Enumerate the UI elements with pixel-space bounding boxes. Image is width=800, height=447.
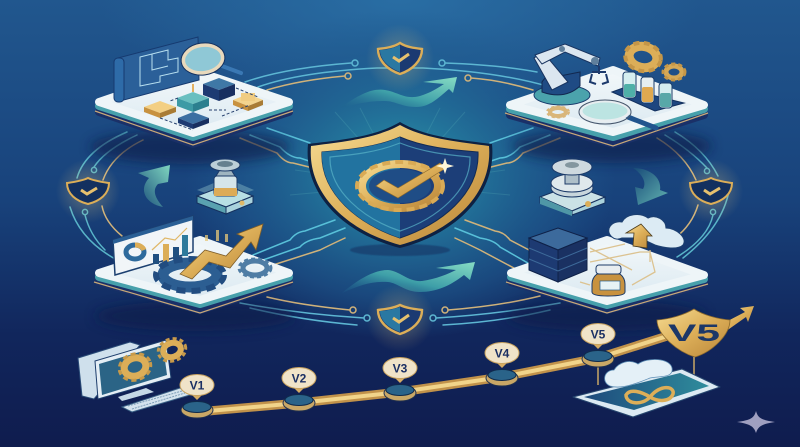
icon: right press	[540, 159, 605, 216]
milestone: V3	[383, 358, 417, 401]
milestone: V2	[282, 368, 316, 411]
small shield: right	[679, 159, 743, 223]
icon: infinity loop	[626, 388, 673, 403]
milestone: V3: V3	[393, 362, 408, 376]
panel: monitoring platform	[94, 216, 295, 331]
icon: blueprint	[114, 37, 199, 102]
main shield	[308, 122, 492, 256]
milestone: V4	[485, 342, 519, 386]
timeline band	[197, 332, 680, 412]
icon: check mark	[376, 163, 446, 198]
arrow: growth	[180, 224, 263, 279]
icon: lens	[579, 100, 656, 128]
arrow: bottom wave	[342, 262, 475, 293]
icon: teal cube	[177, 84, 209, 112]
sparkle	[436, 158, 454, 174]
icon: jar	[592, 265, 625, 296]
icon: gear badge	[357, 162, 443, 210]
icon: test tube rack	[612, 72, 684, 111]
icon: navy cube	[203, 78, 235, 101]
icon: cloud	[609, 215, 684, 248]
milestone: V2: V2	[292, 372, 307, 386]
icon: gold cube right	[233, 93, 263, 111]
arrow: curved right	[633, 168, 668, 205]
icon: gears on screen	[116, 350, 154, 384]
panel: testing platform	[505, 40, 712, 163]
icon: magnifier	[179, 40, 241, 78]
icon: robot arm	[534, 44, 608, 105]
arrow: upload	[626, 224, 652, 248]
V5 gold badge: V5	[668, 320, 720, 347]
right arcs	[657, 132, 730, 258]
icon: tablet with cloud	[573, 357, 720, 417]
icon: navy cube front	[178, 112, 209, 129]
small shield: left	[56, 159, 120, 223]
arrow: top wave	[340, 77, 457, 108]
circuit lines	[70, 60, 730, 325]
V5 gold badge	[657, 306, 754, 357]
icon: left press	[197, 159, 254, 214]
panel: design platform	[90, 37, 293, 164]
icon: small gear	[239, 259, 271, 277]
small shield: bottom	[366, 284, 434, 352]
data traces	[580, 244, 655, 285]
top arcs	[245, 60, 550, 90]
icon: cloud	[605, 359, 672, 387]
panel: deployment platform	[506, 215, 708, 331]
right centre traces	[455, 128, 560, 275]
left arcs	[70, 132, 143, 260]
icon: four-point star	[737, 411, 775, 433]
milestone: V5	[581, 324, 615, 385]
arrow: curved left	[138, 165, 170, 207]
glow bars	[205, 230, 228, 242]
bottom arcs	[240, 296, 560, 325]
small shield: top	[366, 24, 434, 92]
icon: gold cube left	[144, 101, 176, 118]
left centre traces	[240, 128, 345, 265]
icon: large gear	[156, 259, 224, 291]
icon: server stack	[529, 228, 587, 282]
icon: computer with gears	[78, 335, 190, 412]
icon: dashboard	[113, 216, 193, 275]
icon: gears	[547, 40, 685, 118]
milestone: V1: V1	[190, 378, 205, 392]
milestone: V1	[180, 374, 214, 418]
milestone: V5: V5	[591, 328, 606, 342]
milestone: V4: V4	[495, 346, 510, 360]
